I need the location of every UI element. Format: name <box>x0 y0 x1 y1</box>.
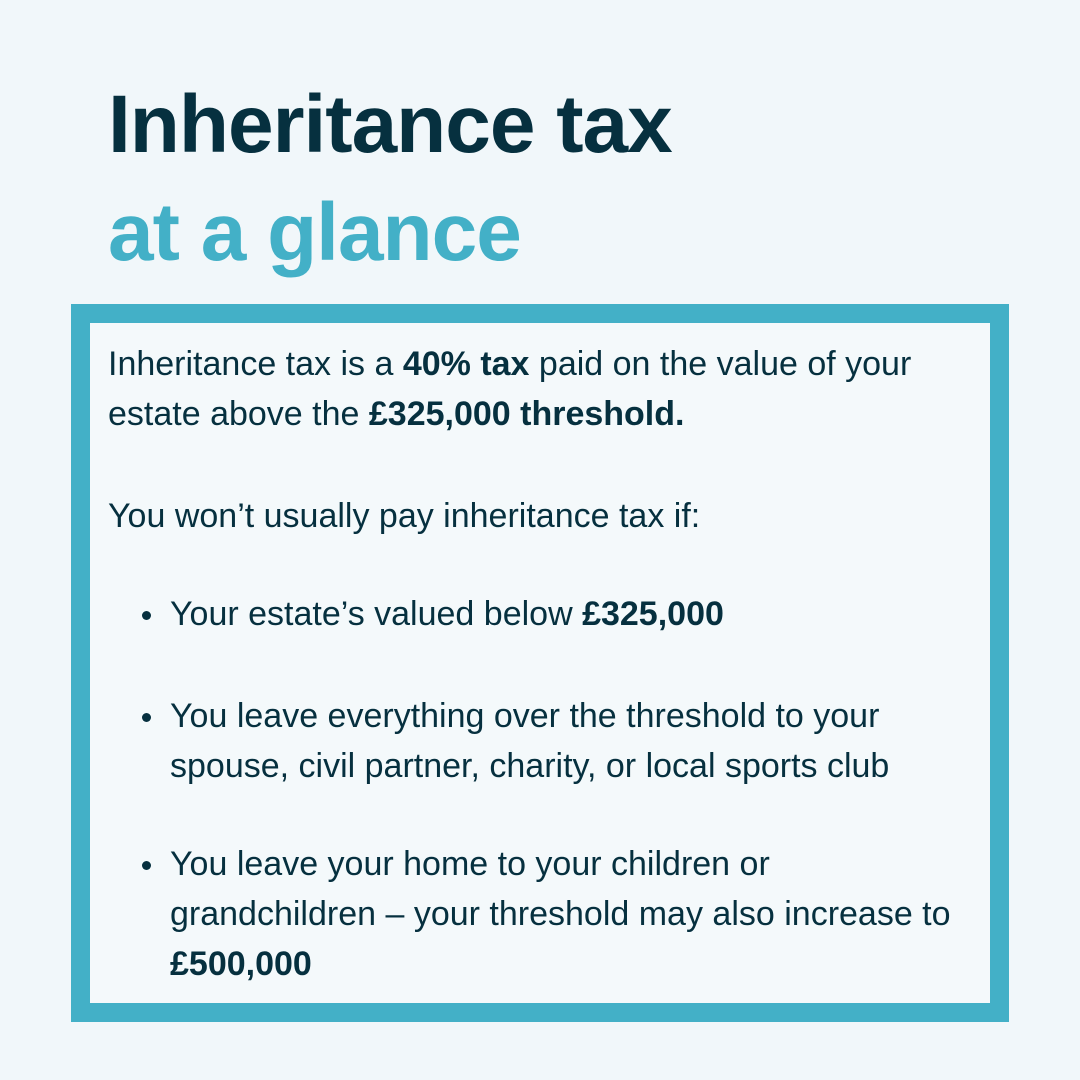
bullet 3: You leave your home to your children or <box>170 845 770 883</box>
title line 1: Inheritance tax <box>108 79 672 170</box>
bullet 3: grandchildren – your threshold may also increase to <box>170 895 951 933</box>
bullet 2: spouse, civil partner, charity, or local sports club <box>170 747 889 785</box>
bullet 3: £500,000 <box>170 945 312 983</box>
bullet 2: You leave everything over the threshold to your <box>170 697 879 735</box>
intro text: Inheritance tax is a 40% tax paid on the value of your <box>108 345 911 383</box>
intro text <box>108 345 911 433</box>
bullet 1: Your estate’s valued below £325,000 <box>170 595 724 633</box>
title line 2: at a glance <box>108 187 521 278</box>
subheading: You won’t usually pay inheritance tax if: <box>108 497 700 535</box>
bullet 3 <box>142 845 951 983</box>
panel: info box <box>71 304 1009 1022</box>
intro text: estate above the £325,000 threshold. <box>108 395 684 433</box>
bullet 2 <box>142 697 889 785</box>
